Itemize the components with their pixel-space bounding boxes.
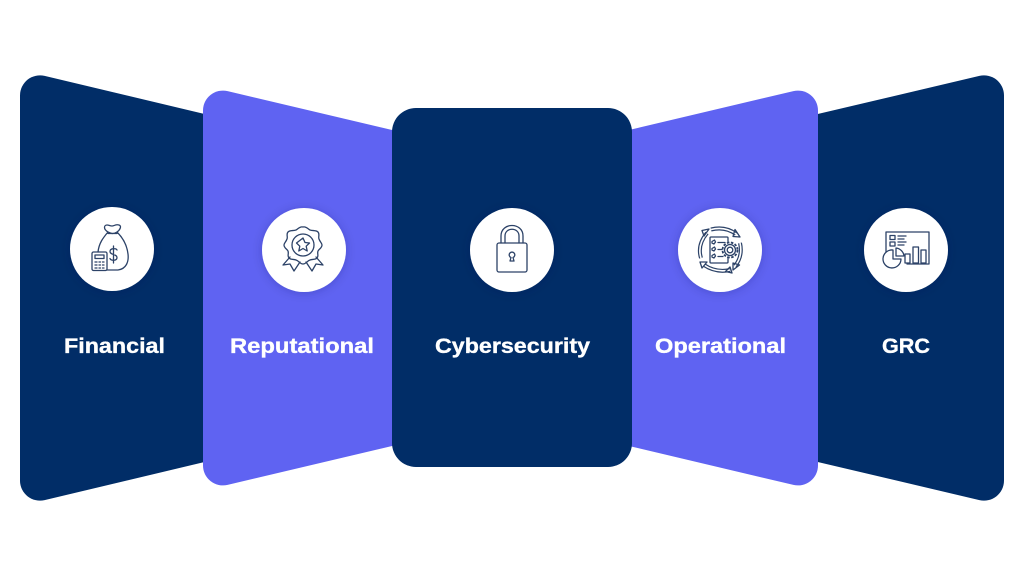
panel: Financial: [20, 75, 215, 501]
label: Cybersecurity: Cybersecurity: [435, 334, 590, 358]
icon badge: Operational process cycle: [678, 208, 762, 292]
panel: GRC: [805, 75, 1004, 501]
icon badge: Cybersecurity padlock: [470, 208, 554, 292]
panel: Cybersecurity: [392, 108, 632, 467]
label: Financial: Financial: [64, 334, 165, 358]
icon badge: Reputational rosette: [262, 208, 346, 292]
label: GRC: GRC: [882, 334, 930, 358]
panel: Reputational: [203, 91, 410, 485]
panel: Operational: [615, 91, 818, 485]
icon badge: GRC dashboard: [864, 208, 948, 292]
label: Operational: Operational: [655, 334, 786, 358]
label: Reputational: Reputational: [230, 334, 374, 358]
icon badge: Financial money bag: [70, 207, 154, 291]
